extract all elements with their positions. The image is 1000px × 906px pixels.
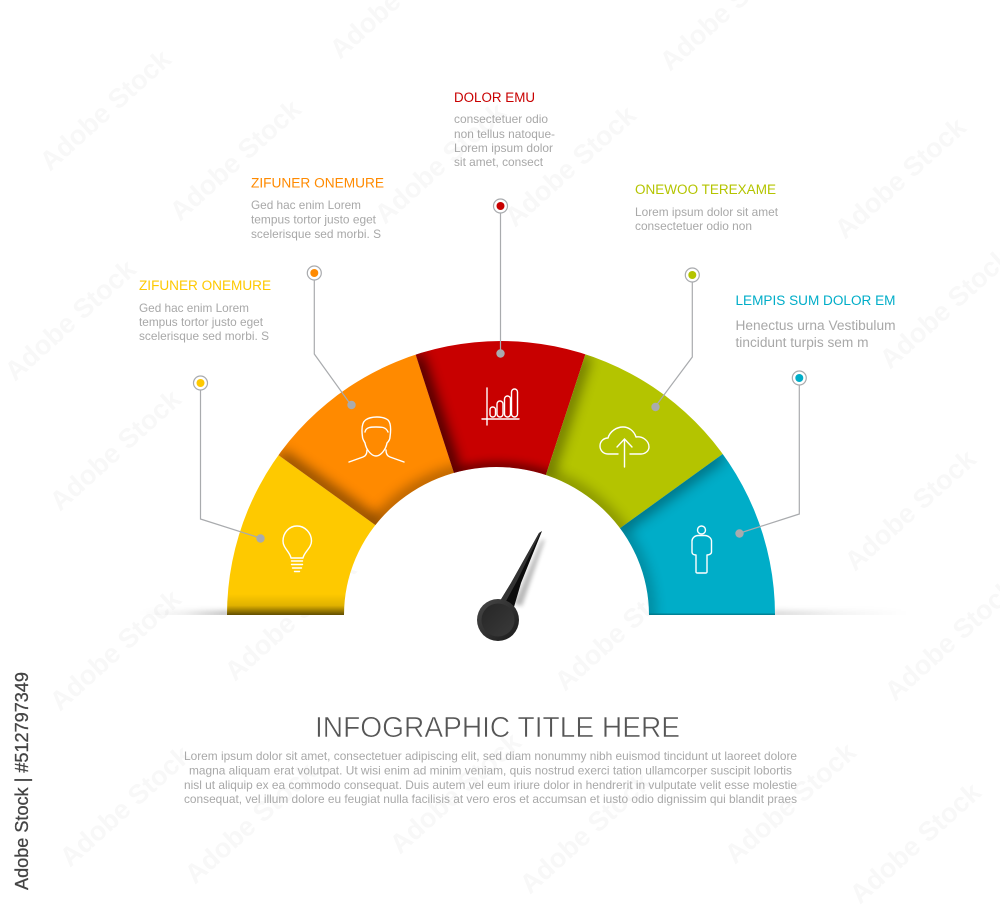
connector: orange <box>307 266 356 409</box>
watermark pattern: Adobe Stock <box>44 383 187 516</box>
watermark pattern: Adobe Stock <box>54 739 197 872</box>
segment: blue <box>620 454 775 615</box>
label: red item: DOLOR EMU <box>454 90 535 105</box>
watermark pattern: Adobe Stock <box>369 96 512 229</box>
connector: red <box>494 199 508 358</box>
label: blue item: LEMPIS SUM DOLOR EM <box>736 293 896 308</box>
label: orange item: scelerisque sed morbi. S <box>251 227 381 241</box>
description text block: consequat, vel illum dolore eu feugiat nulla facilisis at vero eros et accumsan et iusto odio dignissim qui blandit praes <box>184 792 797 806</box>
watermark pattern: Adobe Stock <box>844 776 987 906</box>
label: green item: Lorem ipsum dolor sit amet <box>635 205 779 219</box>
label: orange item: ZIFUNER ONEMURE <box>251 176 384 190</box>
connector: blue <box>735 371 806 538</box>
label: yellow item: ZIFUNER ONEMURE <box>139 278 271 293</box>
icon: bar chart <box>482 388 519 425</box>
watermark pattern: Adobe Stock <box>719 736 862 869</box>
label: green item: consectetuer odio non <box>635 219 752 233</box>
watermark pattern: Adobe Stock <box>219 553 362 686</box>
description text block: Lorem ipsum dolor sit amet, consectetuer adipiscing elit, sed diam nonummy nibh euismod tincidunt ut laoreet dolore <box>184 749 797 763</box>
label: orange item: tempus tortor justo eget <box>251 212 377 226</box>
watermark pattern: Adobe Stock <box>514 766 657 899</box>
watermark pattern: Adobe Stock <box>499 99 642 232</box>
segment: orange <box>278 354 454 525</box>
watermark pattern: Adobe Stock <box>384 726 527 859</box>
base shadows beside the gauge <box>140 611 907 617</box>
label: blue item: tincidunt turpis sem m <box>736 335 868 350</box>
label: orange item <box>251 176 384 241</box>
label: yellow item: Ged hac enim Lorem <box>139 301 249 315</box>
title: INFOGRAPHIC TITLE HERE <box>315 712 680 744</box>
icon: man's head <box>349 417 404 462</box>
description text block: magna aliquam erat volutpat. Ut wisi enim ad minim veniam, quis nostrud exerci tation ullamcorper suscipit lobortis <box>189 764 792 778</box>
watermark pattern: Adobe Stock <box>0 253 142 386</box>
label: red item <box>454 90 555 169</box>
watermark pattern: Adobe Stock <box>549 563 692 696</box>
watermark pattern: Adobe Stock <box>34 43 177 176</box>
gauge: semicircular segments <box>227 341 775 615</box>
label: yellow item: tempus tortor justo eget <box>139 315 264 329</box>
label: yellow item: scelerisque sed morbi. S <box>139 329 269 343</box>
segment: green <box>546 354 723 528</box>
segment: red <box>416 341 586 475</box>
watermark pattern: Adobe Stock <box>44 583 187 716</box>
description text block: nisl ut aliquip ex ea commodo consequat. Duis autem vel eum iriure dolor in hendrerit in vulputate velit esse molestie <box>184 778 797 792</box>
icon: cloud upload <box>600 427 649 467</box>
label: red item: consectetuer odio <box>454 112 548 126</box>
label: green item: ONEWOO TEREXAME <box>635 182 776 197</box>
gauge needle <box>477 531 545 641</box>
watermark pattern: Adobe Stock <box>829 111 972 244</box>
label: green item <box>635 182 779 233</box>
label: yellow item <box>139 278 271 343</box>
label: red item: sit amet, consect <box>454 155 544 169</box>
label: orange item: Ged hac enim Lorem <box>251 198 361 212</box>
label: red item: Lorem ipsum dolor <box>454 141 553 155</box>
icon: light bulb <box>283 526 312 572</box>
watermark pattern: Adobe Stock <box>839 443 982 576</box>
label: blue item <box>736 293 896 350</box>
watermark pattern: Adobe Stock <box>164 93 307 226</box>
connector: green <box>651 268 699 411</box>
stock id side text: Adobe Stock | #512797349 <box>12 672 32 890</box>
watermark pattern: Adobe Stock <box>179 756 322 889</box>
icon: person <box>692 526 712 573</box>
label: blue item: Henectus urna Vestibulum <box>736 318 896 333</box>
connector: yellow <box>194 376 265 543</box>
description text block <box>184 749 797 806</box>
label: red item: non tellus natoque- <box>454 127 555 141</box>
segment: yellow <box>227 455 376 615</box>
